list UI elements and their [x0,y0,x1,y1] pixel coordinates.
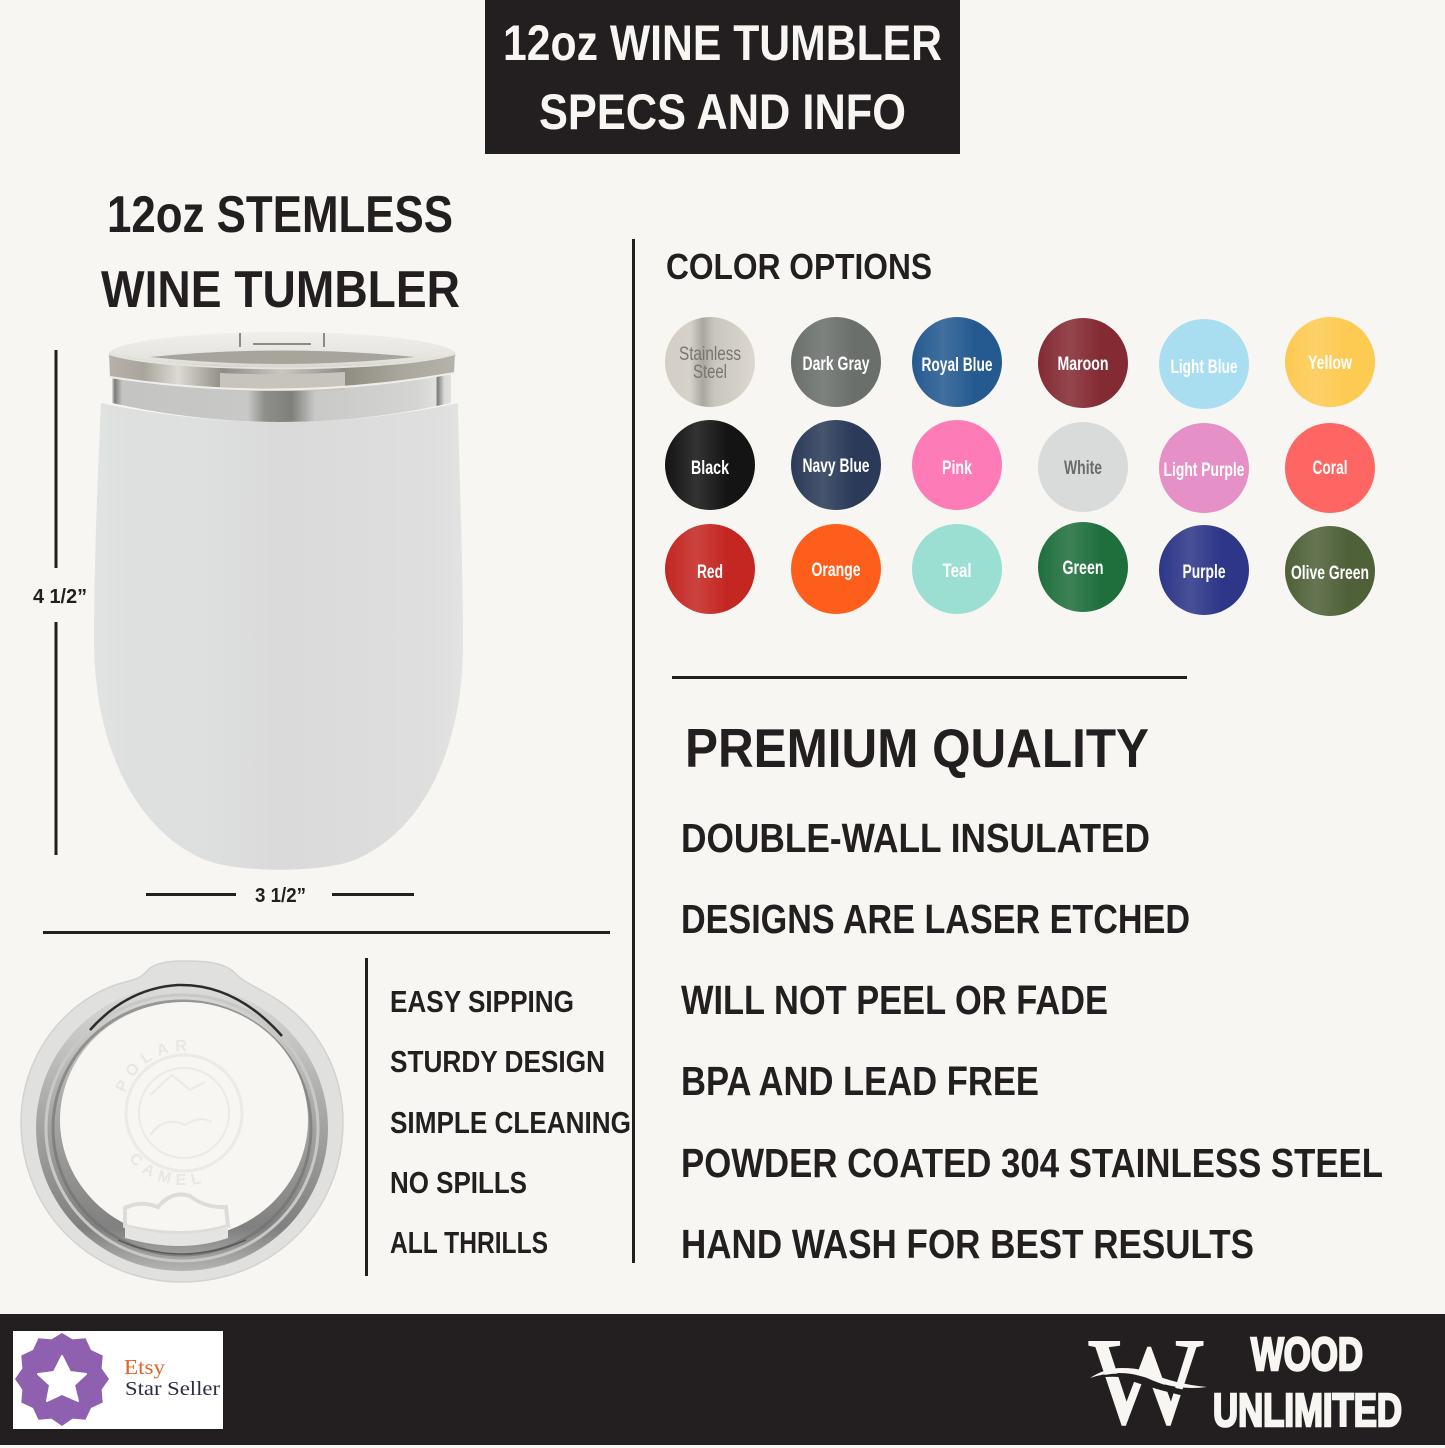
lid features list [390,984,631,1260]
swatch: white: White [1064,458,1102,479]
swatch: olive green [1285,526,1375,616]
swatch: dark gray [791,317,881,407]
swatch: royal blue: Royal Blue [922,355,992,376]
swatch: light purple [1159,423,1249,513]
swatch: maroon [1038,318,1128,408]
embossed brand text: POLAR [116,1040,186,1092]
swatch: black: Black [691,458,729,479]
swatch: navy blue [791,420,881,510]
swatch: light blue: Light Blue [1170,357,1238,378]
swatch: white [1038,422,1128,512]
product heading: 12oz STEMLESS [107,186,453,244]
lid features list: SIMPLE CLEANING [390,1105,631,1140]
width dimension [146,885,414,907]
product heading [101,186,460,319]
icon: W monogram with swoosh: W [1089,1313,1203,1448]
icon: purple seal with star [15,1333,109,1426]
swatch: stainless steel: Stainless [679,344,741,365]
swatch: teal: Teal [942,561,972,582]
lid features list: ALL THRILLS [390,1225,548,1260]
swatch: purple [1159,525,1249,615]
features list: DOUBLE-WALL INSULATED [681,815,1150,861]
features list: BPA AND LEAD FREE [681,1058,1039,1104]
swatch: green: Green [1062,558,1104,579]
title banner [485,0,960,154]
swatch: pink: Pink [942,458,972,479]
swatch: orange: Orange [812,560,860,581]
etsy star seller badge [13,1331,223,1429]
swatch: royal blue [912,317,1002,407]
lid features list: NO SPILLS [390,1165,527,1200]
swatch: pink [912,420,1002,510]
features list: WILL NOT PEEL OR FADE [681,977,1108,1023]
swatch: orange [791,524,881,614]
title banner: 12oz WINE TUMBLER [503,15,942,71]
swatch: maroon: Maroon [1058,354,1108,375]
etsy star seller badge: Etsy [124,1355,166,1379]
swatch: green [1038,522,1128,612]
height dimension: 4 1/2” [33,586,87,608]
swatch: coral [1285,423,1375,513]
wood unlimited logo: WOOD [1251,1328,1363,1380]
swatch: olive green: Olive Green [1291,563,1369,584]
premium quality heading: PREMIUM QUALITY [685,717,1149,779]
height dimension [33,350,87,855]
tumbler illustration [94,332,463,870]
features list: HAND WASH FOR BEST RESULTS [681,1221,1254,1267]
swatch: yellow [1285,317,1375,407]
swatch: navy blue: Navy Blue [802,456,870,477]
color options heading: COLOR OPTIONS [666,246,932,287]
lid features list: EASY SIPPING [390,984,574,1019]
features list: DESIGNS ARE LASER ETCHED [681,896,1190,942]
product heading: WINE TUMBLER [101,261,460,319]
color swatches [665,317,1375,616]
swatch: stainless steel: Steel [693,362,727,383]
width dimension: 3 1/2” [255,885,306,907]
swatch: stainless steel [665,317,755,407]
lid features list: STURDY DESIGN [390,1044,605,1079]
title banner: SPECS AND INFO [539,84,906,140]
swatch: light blue [1159,319,1249,409]
swatch: red [665,524,755,614]
swatch: yellow: Yellow [1308,353,1352,374]
embossed brand text [116,1040,201,1185]
swatch: purple: Purple [1182,562,1226,583]
etsy star seller badge: Star Seller [125,1378,220,1400]
swatch: coral: Coral [1312,458,1348,479]
features list [681,815,1383,1267]
swatch: red: Red [697,562,723,583]
swatch: teal [912,524,1002,614]
swatch: dark gray: Dark Gray [802,354,870,375]
swatch: light purple: Light Purple [1164,460,1244,481]
footer band [0,1314,1445,1445]
wood unlimited logo [1086,1313,1402,1448]
embossed brand text: CAMEL [131,1154,201,1185]
swatch: black [665,420,755,510]
lid illustration [20,960,344,1283]
